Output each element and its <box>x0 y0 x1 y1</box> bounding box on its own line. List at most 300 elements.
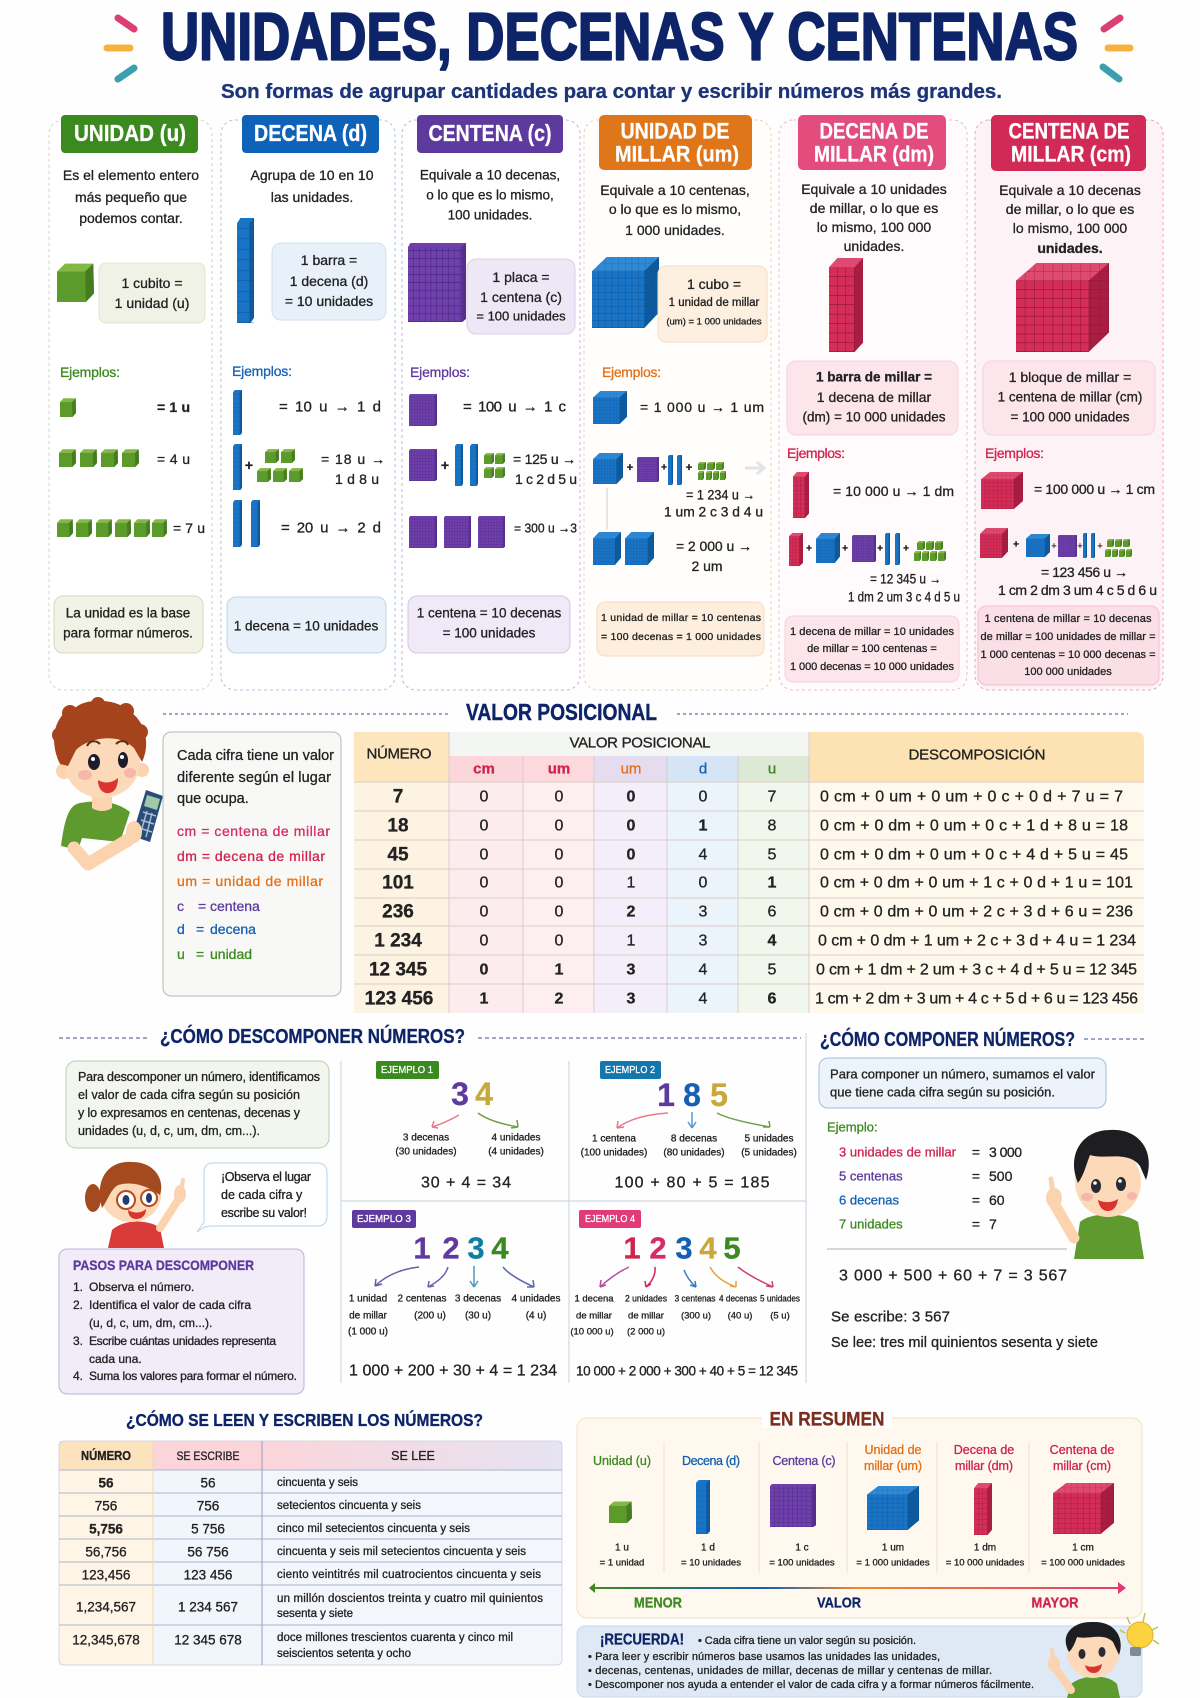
example: 7 u <box>57 519 205 537</box>
example 3: (30 u) <box>465 1310 491 1322</box>
column: unidad <box>593 1454 651 1568</box>
heading: unidad de millar: MILLAR (um) <box>615 142 739 166</box>
heading: en resumen: EN RESUMEN <box>770 1410 884 1430</box>
heading: recuerda: ¡RECUERDA! <box>600 1632 684 1648</box>
example: 300 u: = 300 u →3 <box>514 520 577 536</box>
callout: 1 decena de millar: 1 decena de millar = 10 unidades <box>790 626 954 638</box>
column: centena: = 100 unidades <box>769 1558 835 1568</box>
text: definition: de millar, o lo que es <box>810 200 938 216</box>
example: 12345 u: + <box>903 544 909 554</box>
table header: SE ESCRIBE <box>176 1449 240 1463</box>
callout: 1 cubo: (um) = 1 000 unidades <box>666 316 762 328</box>
example 2: 8 decenas <box>671 1134 717 1144</box>
table rows: 0 <box>627 846 636 864</box>
callout: 1 cubito: 1 unidad (u) <box>115 295 189 311</box>
callout: 1 barra: = 10 unidades <box>285 293 373 309</box>
table rows: 0 cm + 1 dm + 2 um + 3 c + 4 d + 5 u = 12 345 <box>816 962 1137 978</box>
example: 18 u: = 18 u → <box>321 451 385 467</box>
example 4: 2 <box>649 1230 667 1266</box>
text: definition: Agrupa de 10 en 10 <box>250 167 374 183</box>
icon: blue cube <box>592 257 659 328</box>
example: 1 u: = 1 u <box>157 399 190 415</box>
example: 123456 u: + <box>1051 541 1057 551</box>
table rows: 1 <box>480 990 489 1008</box>
panel: decena de millar <box>779 115 967 690</box>
callout: 1 bloque de millar: 1 centena de millar (cm) <box>998 390 1142 404</box>
panel: centena <box>402 115 580 690</box>
column: unidad de millar: = 1 000 unidades <box>856 1558 930 1568</box>
table header <box>81 1448 435 1463</box>
list: steps: Observa el número. <box>89 1280 194 1294</box>
text: definition: unidades. <box>1037 240 1103 256</box>
example 4: 3 centenas <box>674 1294 716 1304</box>
table rows: 1 <box>627 874 636 892</box>
column: unidad de millar: millar (um) <box>864 1459 922 1473</box>
example 2: 5 <box>710 1077 728 1113</box>
table rows: 5 <box>768 962 777 978</box>
legend: abbreviations: = <box>196 921 204 937</box>
legend: abbreviations: centena <box>210 898 260 914</box>
label: ejemplos: Ejemplos: <box>985 445 1044 461</box>
label: ejemplos: Ejemplos: <box>60 364 120 380</box>
panel: unidad <box>49 115 212 690</box>
example 4: 5 <box>723 1230 741 1266</box>
callout: 1 centena de millar: 1 000 centenas = 10 000 decenas = <box>980 649 1156 661</box>
column: unidad: 1 u <box>615 1542 629 1554</box>
callout: 1 unidad de millar <box>597 602 764 656</box>
table rows: 1 234 <box>374 930 422 952</box>
example 3: 2 centenas <box>398 1294 446 1304</box>
callout: 1 barra de millar <box>787 361 958 435</box>
heading: unidad <box>61 115 198 153</box>
heading: unidad de millar: UNIDAD DE <box>620 118 730 144</box>
table rows: sesenta y siete <box>277 1608 353 1620</box>
example 3: 1 <box>413 1230 431 1266</box>
table rows: 3 <box>627 990 636 1008</box>
text: definition: Equivale a 10 decenas <box>999 182 1141 198</box>
column: centena de millar <box>1041 1443 1125 1568</box>
heading: como se leen: ¿CÓMO SE LEEN Y ESCRIBEN LOS NÚMEROS? <box>126 1409 483 1430</box>
callout: 1 centena <box>408 596 570 653</box>
panel: pasos para descomponer <box>59 1249 304 1394</box>
column: unidad de millar: Unidad de <box>864 1443 922 1457</box>
example 4: 4 decenas <box>719 1294 757 1304</box>
table rows: 0 <box>555 818 564 834</box>
example 1: 4 unidades <box>492 1132 540 1144</box>
text: definition: podemos contar. <box>79 210 183 226</box>
table header: d <box>699 760 707 778</box>
text: definition: 100 unidades. <box>448 208 532 222</box>
example: 123456 u: = 123 456 u → <box>1041 564 1128 580</box>
subtitle: Son formas de agrupar cantidades para contar y escribir números más grandes. <box>221 81 1002 103</box>
list: steps: (u, d, c, um, dm, cm...). <box>89 1316 212 1330</box>
legend: abbreviations: = <box>198 898 206 914</box>
table rows: 756 <box>95 1498 117 1514</box>
example 4: de millar <box>576 1310 612 1322</box>
example 2: 1 <box>657 1077 675 1113</box>
column: centena de millar: = 100 000 unidades <box>1041 1558 1125 1568</box>
example: 10 u <box>233 390 381 435</box>
text: explanation: diferente según el lugar <box>177 770 331 786</box>
column: decena: = 10 unidades <box>681 1558 741 1568</box>
example 3: (200 u) <box>414 1310 446 1322</box>
heading: centena <box>417 115 563 153</box>
text: definition: las unidades. <box>271 189 353 205</box>
table rows: 12 345 <box>369 960 427 980</box>
text: explanation <box>177 748 334 807</box>
example: 18 u: 1 d 8 u <box>335 471 379 487</box>
column: decena de millar <box>946 1443 1024 1568</box>
example 1: 4 <box>475 1076 493 1112</box>
text: definition: o lo que es lo mismo, <box>609 201 741 217</box>
example 1: 30 + 4 = 34 <box>421 1174 511 1192</box>
heading: decena <box>242 115 379 153</box>
example: 125 u <box>409 444 577 487</box>
list: steps: Suma los valores para formar el número. <box>89 1369 297 1383</box>
example 4: 5 unidades <box>760 1294 800 1304</box>
example 4: 10 000 + 2 000 + 300 + 40 + 5 = 12 345 <box>576 1364 798 1378</box>
example: 125 u: + <box>441 457 449 473</box>
example 4 <box>570 1210 800 1378</box>
table rows: seiscientos setenta y ocho <box>277 1648 411 1660</box>
example 3: 1 000 + 200 + 30 + 4 = 1 234 <box>349 1362 557 1380</box>
table header <box>366 734 1046 778</box>
text: definition: unidades. <box>844 238 904 254</box>
heading: decena de millar: DECENA DE <box>820 118 928 144</box>
example: composing 3567: = <box>972 1168 980 1184</box>
legend: abbreviations: u <box>177 946 185 962</box>
table rows: 0 cm + 0 dm + 0 um + 0 c + 1 d + 8 u = 18 <box>820 818 1128 834</box>
example: composing 3567: 3 000 <box>989 1144 1022 1160</box>
table rows: 1 <box>627 932 636 950</box>
example: composing 3567: = <box>972 1144 980 1160</box>
example 2: (80 unidades) <box>663 1148 725 1158</box>
table rows: cincuenta y seis <box>277 1477 358 1489</box>
character: boy with idea <box>1048 1622 1121 1698</box>
table rows: 4 <box>768 932 777 950</box>
text: definition: Equivale a 10 decenas, <box>420 168 560 182</box>
table rows: 0 <box>480 818 489 834</box>
callout: 1 decena <box>227 597 386 653</box>
example: 1000 u: = 1 000 u → 1 um <box>640 399 764 415</box>
example: 123456 u: 1 cm 2 dm 3 um 4 c 5 d 6 u <box>998 582 1157 598</box>
example 2: 8 <box>683 1077 701 1113</box>
example: composing 3567: Ejemplo: <box>827 1120 878 1134</box>
panel: unidad de millar <box>584 115 771 690</box>
callout: 1 barra: 1 decena (d) <box>290 273 368 289</box>
table rows: 18 <box>387 816 409 836</box>
table rows: 6 <box>768 990 777 1008</box>
legend: abbreviations: d <box>177 921 185 937</box>
callout: definicion descomponer: unidades (u, d, c, um, dm, cm...). <box>78 1124 260 1138</box>
heading: decena de millar: MILLAR (dm) <box>814 142 934 166</box>
list: reminders: • Descomponer nos ayuda a entender el valor de cada cifra y a formar números fácilmente. <box>588 1679 1034 1691</box>
table rows: 2 <box>555 990 564 1008</box>
table rows: 5 756 <box>191 1522 225 1536</box>
table rows: 123 456 <box>184 1568 232 1582</box>
speech bubble: escribe su valor! <box>221 1206 307 1220</box>
example: 1234 u: + <box>686 462 692 474</box>
example: 12345 u: 1 dm 2 um 3 c 4 d 5 u <box>848 590 960 604</box>
label: ejemplos: Ejemplos: <box>232 363 292 379</box>
label: ejemplos: Ejemplos: <box>602 364 661 380</box>
text: definition <box>250 167 374 205</box>
example 1: 3 <box>451 1076 469 1112</box>
table header: um <box>548 760 570 778</box>
example: 125 u: = 125 u → <box>513 451 576 467</box>
table header: NÚMERO <box>366 746 432 762</box>
text: explanation: Cada cifra tiene un valor <box>177 748 334 764</box>
example: 100000 u <box>981 472 1155 509</box>
heading: decena de millar <box>798 115 946 170</box>
table rows: 0 <box>480 846 489 864</box>
legend: abbreviations: decena <box>210 921 256 937</box>
label: ejemplos: Ejemplos: <box>410 364 470 380</box>
panel: recuerda <box>577 1626 1142 1697</box>
character: boy pointing <box>1046 1130 1149 1259</box>
example: 123456 u: + <box>1013 540 1019 550</box>
text: definition <box>600 182 750 238</box>
example 3: 3 decenas <box>455 1294 501 1304</box>
table rows: 3 <box>699 932 708 950</box>
table rows: ciento veintitrés mil cuatrocientos cincuenta y seis <box>277 1569 541 1581</box>
example: 4 u <box>59 449 190 467</box>
table rows: 5,756 <box>89 1522 123 1536</box>
callout: 1 centena de millar: 1 centena de millar = 10 decenas <box>984 613 1152 625</box>
example 4: 3 <box>675 1230 693 1266</box>
table rows: 1 <box>555 962 564 978</box>
example 1: 3 decenas <box>403 1132 449 1144</box>
legend: abbreviations <box>177 823 330 962</box>
callout: 1 cubito: 1 cubito = <box>121 275 183 291</box>
legend: abbreviations: cm = centena de millar <box>177 823 330 839</box>
example 3: 1 unidad <box>349 1294 387 1304</box>
panel: cifra legend <box>163 732 341 996</box>
example 3: 3 <box>467 1230 485 1266</box>
table rows: 6 <box>768 904 777 920</box>
panel: decena <box>221 115 395 690</box>
example: composing 3567: 60 <box>989 1192 1005 1208</box>
text: definition: lo mismo, 100 000 <box>1013 220 1127 236</box>
example: 12345 u: = 12 345 u → <box>870 572 941 586</box>
table header: NÚMERO <box>81 1448 131 1463</box>
table rows: 0 <box>627 788 636 806</box>
example 2: (5 unidades) <box>741 1148 797 1158</box>
table rows: 4 <box>699 990 708 1008</box>
table rows: 0 <box>699 788 708 806</box>
example 2: 100 + 80 + 5 = 185 <box>614 1174 770 1192</box>
example: 123456 u: + <box>1077 541 1083 551</box>
column: decena de millar: Decena de <box>954 1443 1014 1457</box>
example: 10000 u: = 10 000 u → 1 dm <box>833 483 954 499</box>
callout: 1 decena: 1 decena = 10 unidades <box>234 618 378 634</box>
table rows: 56 <box>98 1476 114 1490</box>
table rows: 12,345,678 <box>72 1632 140 1648</box>
legend: abbreviations: dm = decena de millar <box>177 848 325 864</box>
example: 125 u: 1 c 2 d 5 u <box>515 471 577 487</box>
arrow: menor to mayor <box>589 1582 1126 1594</box>
example: composing 3567: 3 000 + 500 + 60 + 7 = 3 567 <box>839 1268 1067 1284</box>
table header: DESCOMPOSICIÓN <box>908 746 1046 764</box>
table header: u <box>768 760 776 778</box>
table rows: 1 <box>768 874 777 892</box>
example 4: (10 000 u) <box>570 1326 614 1338</box>
callout: 1 cubito <box>99 263 205 323</box>
example: 12345 u: + <box>806 544 812 554</box>
example 4: (300 u) <box>681 1310 711 1322</box>
table rows: 0 <box>480 788 489 806</box>
example 3: EJEMPLO 3 <box>357 1213 411 1225</box>
callout: 1 unidad de millar: 1 unidad de millar = 10 centenas <box>601 612 761 624</box>
callout: 1 decena de millar: de millar = 100 centenas = <box>807 643 937 655</box>
legend: abbreviations: = <box>196 946 204 962</box>
callout: 1 cubo: 1 cubo = <box>687 276 741 292</box>
example 3 <box>348 1210 560 1380</box>
example: 100 u: = 100 u → 1 c <box>463 398 566 416</box>
text: definition: lo mismo, 100 000 <box>817 219 931 235</box>
table rows: 0 <box>555 904 564 920</box>
example 2: EJEMPLO 2 <box>605 1064 655 1076</box>
callout: definicion descomponer: Para descomponer un número, identificamos <box>78 1070 320 1084</box>
table rows: 4 <box>699 846 708 864</box>
callout: 1 barra de millar: 1 barra de millar = <box>816 370 932 384</box>
table rows: 3 <box>627 962 636 978</box>
example: composing 3567: Se lee: tres mil quinientos sesenta y siete <box>831 1335 1098 1351</box>
table rows: 0 <box>480 874 489 892</box>
table rows: doce millones trescientos cuarenta y cinco mil <box>277 1632 513 1644</box>
example: 10 u: = 10 u → 1 d <box>279 398 381 416</box>
column: decena de millar: 1 dm <box>974 1542 996 1554</box>
example 2 <box>581 1061 797 1192</box>
table rows: 0 <box>555 874 564 892</box>
callout: definicion descomponer: el valor de cada cifra según su posición <box>78 1088 300 1102</box>
example 3: 4 unidades <box>512 1294 560 1304</box>
legend: abbreviations: unidad <box>210 946 252 962</box>
example: 1234 u: + <box>661 462 667 474</box>
icon: green cube <box>57 264 94 302</box>
example: composing 3567: 6 decenas <box>839 1192 899 1208</box>
table rows: 0 cm + 0 dm + 0 um + 1 c + 0 d + 1 u = 101 <box>820 874 1133 892</box>
example 2: 1 centena <box>592 1134 636 1144</box>
example: 1000 u <box>593 391 764 424</box>
text: definition: de millar, o lo que es <box>1006 201 1134 217</box>
callout: 1 decena de millar: 1 000 decenas = 10 000 unidades <box>790 661 954 673</box>
table rows <box>365 786 1138 1010</box>
callout: 1 placa: 1 placa = <box>492 269 550 285</box>
example 1 <box>376 1061 544 1192</box>
callout: 1 centena de millar: de millar = 100 unidades de millar = <box>980 631 1156 643</box>
example: 12345 u: + <box>877 544 883 554</box>
callout: 1 centena de millar: 100 000 unidades <box>1024 666 1112 678</box>
table rows <box>72 1476 543 1660</box>
callout: 1 barra: 1 barra = <box>301 252 357 268</box>
icon: light bulb <box>1120 1613 1159 1656</box>
labels: menor valor mayor <box>634 1594 1079 1612</box>
labels: menor valor mayor: MENOR <box>634 1594 682 1612</box>
character: boy with calculator <box>52 697 163 864</box>
icon: purple plate <box>408 243 466 322</box>
table rows: 0 cm + 0 um + 0 um + 0 c + 0 d + 7 u = 7 <box>820 788 1123 806</box>
labels: menor valor mayor: MAYOR <box>1032 1594 1079 1612</box>
callout: 1 bloque de millar: = 100 000 unidades <box>1011 410 1130 424</box>
example: 20 u: = 20 u → 2 d <box>281 520 381 536</box>
text: definition <box>63 167 199 226</box>
example: 300 u <box>409 516 577 548</box>
example 3: 4 <box>491 1230 509 1266</box>
column: centena <box>769 1454 836 1568</box>
table header: um <box>621 760 641 778</box>
table rows: 0 <box>480 962 489 978</box>
column: decena de millar: = 10 000 unidades <box>946 1558 1024 1568</box>
example: 1 u <box>60 398 190 417</box>
heading: centena de millar <box>991 115 1146 171</box>
table rows: 0 <box>480 904 489 920</box>
example: 2000 u: = 2 000 u → <box>676 538 752 554</box>
column: decena: Decena (d) <box>682 1454 740 1468</box>
heading: como descomponer: ¿CÓMO DESCOMPONER NÚMEROS? <box>160 1024 465 1048</box>
column: decena: 1 d <box>701 1542 715 1554</box>
table rows: 0 cm + 0 dm + 1 um + 2 c + 3 d + 4 u = 1 234 <box>818 932 1136 950</box>
callout: 1 placa: = 100 unidades <box>476 308 566 324</box>
example: 20 u <box>233 500 381 547</box>
example 4: 1 decena <box>574 1294 614 1304</box>
example: 7 u: = 7 u <box>173 520 205 536</box>
callout: definicion componer: que tiene cada cifra según su posición. <box>830 1084 1055 1100</box>
example 3: 2 <box>442 1230 460 1266</box>
example: 18 u: + <box>245 457 253 473</box>
table rows: 0 <box>555 788 564 806</box>
list: steps: Escribe cuántas unidades representa <box>89 1334 276 1348</box>
table rows: 0 <box>699 874 708 892</box>
example: 10000 u <box>793 472 954 518</box>
heading: unidad: UNIDAD (u) <box>74 120 186 146</box>
example: composing 3567: = <box>972 1192 980 1208</box>
list: steps <box>73 1280 297 1383</box>
table rows: 7 <box>393 786 403 808</box>
text: definition: Equivale a 10 centenas, <box>600 182 750 198</box>
callout: 1 cubo <box>658 266 767 342</box>
table rows: un millón doscientos treinta y cuatro mil quinientos <box>277 1593 543 1605</box>
example: composing 3567: 3 unidades de millar <box>839 1144 957 1160</box>
legend: abbreviations: um = unidad de millar <box>177 873 323 889</box>
panel: centena de millar <box>975 115 1163 690</box>
example 4: (40 u) <box>728 1310 752 1322</box>
example: 1234 u: = 1 234 u → <box>686 488 755 502</box>
list: reminders <box>588 1635 1034 1691</box>
example: composing 3567: 5 centenas <box>839 1168 903 1184</box>
example: 12345 u <box>789 533 960 604</box>
column: centena: Centena (c) <box>772 1454 836 1468</box>
legend: abbreviations: c <box>177 898 184 914</box>
table rows: 123,456 <box>82 1568 130 1582</box>
list: steps: 3. <box>73 1334 83 1348</box>
table rows: 12 345 678 <box>174 1632 242 1648</box>
table rows: 0 <box>480 932 489 950</box>
table rows: 1 cm + 2 dm + 3 um + 4 c + 5 d + 6 u = 123 456 <box>815 990 1138 1008</box>
list: reminders: • decenas, centenas, unidades de millar, decenas de millar y centenas de millar. <box>588 1665 992 1677</box>
list: reminders: • Para leer y escribir números base usamos las unidades las unidades, <box>588 1651 940 1663</box>
example: composing 3567: Se escribe: 3 567 <box>831 1308 950 1326</box>
list: steps: 4. <box>73 1369 83 1383</box>
table rows: 56 756 <box>187 1544 229 1560</box>
column: unidad de millar: 1 um <box>882 1542 904 1554</box>
panel: en resumen <box>577 1410 1142 1618</box>
table header: SE LEE <box>391 1449 435 1463</box>
text: definition: o lo que es lo mismo, <box>426 188 554 202</box>
table rows: 0 <box>555 846 564 864</box>
column: decena de millar: millar (dm) <box>955 1459 1013 1473</box>
example 3: de millar <box>349 1310 388 1322</box>
